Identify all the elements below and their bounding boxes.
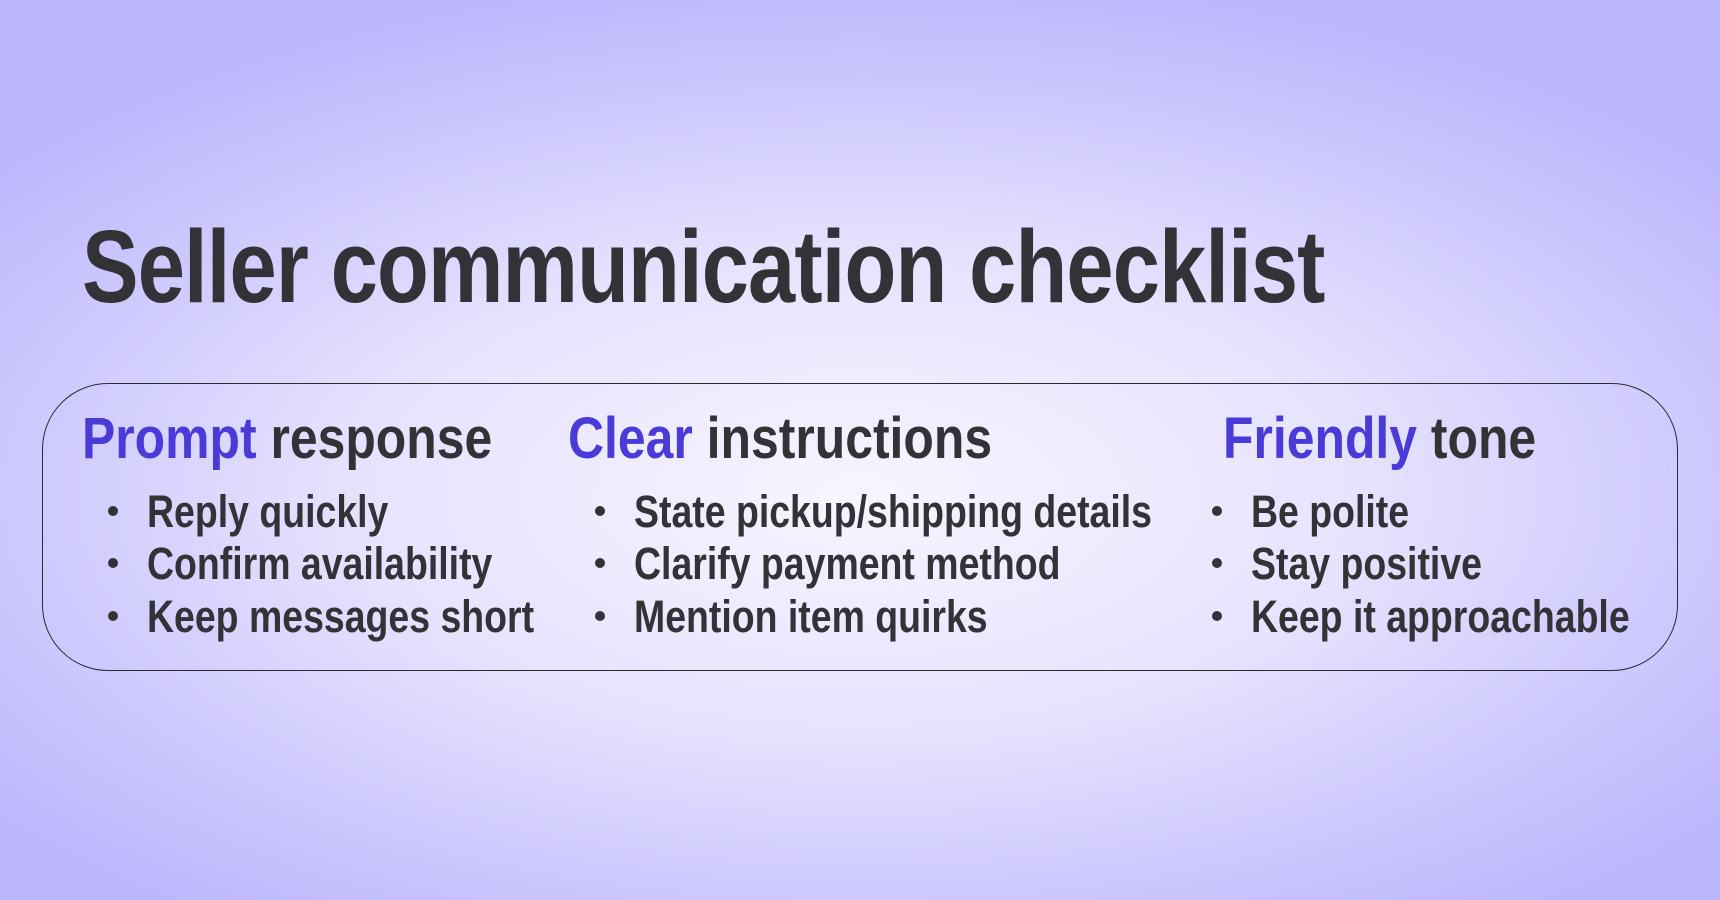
column: friendly tone: Keep it approachable — [1251, 591, 1630, 642]
panel: checklist box — [42, 383, 1678, 671]
column: friendly tone: Stay positive — [1251, 538, 1482, 589]
heading: clear instructions: Clear instructions — [568, 406, 992, 471]
bullet list: clear instructions — [595, 486, 1152, 642]
column: friendly tone: Be polite — [1251, 486, 1409, 537]
heading: friendly tone: Friendly tone — [1223, 406, 1536, 471]
column: prompt response — [82, 406, 534, 642]
column: friendly tone — [1212, 406, 1630, 642]
column: clear instructions: Clarify payment method — [634, 538, 1060, 589]
heading: prompt response: Prompt response — [82, 406, 492, 471]
bullet list: prompt response — [108, 486, 534, 642]
column: clear instructions: Mention item quirks — [634, 591, 988, 642]
column: clear instructions — [568, 406, 1152, 642]
column: prompt response: Confirm availability — [147, 538, 492, 589]
column: prompt response: Keep messages short — [147, 591, 534, 642]
column: clear instructions: State pickup/shipping details — [634, 486, 1152, 537]
column: prompt response: Reply quickly — [147, 486, 388, 537]
title: Seller communication checklist — [82, 209, 1325, 324]
bullet list: friendly tone — [1212, 486, 1630, 642]
